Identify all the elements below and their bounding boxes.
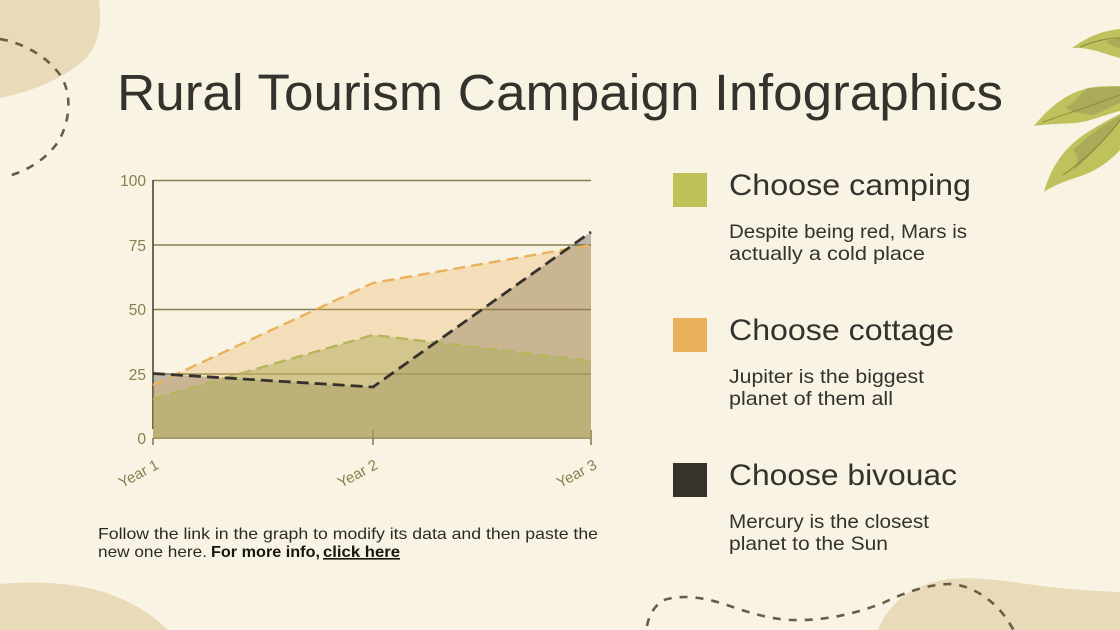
series: camping area <box>153 335 591 438</box>
series: camping line <box>153 335 591 399</box>
text: bivouac: planet to the Sun <box>729 533 888 555</box>
text: camping: Despite being red, Mars is <box>729 221 967 243</box>
chart note: new one here. <box>98 544 207 561</box>
swatch: bivouac <box>673 463 707 497</box>
blob: bottom right <box>878 578 1120 630</box>
y axis line <box>152 180 154 429</box>
chart note <box>98 526 598 561</box>
text: bivouac: Mercury is the closest <box>729 511 930 533</box>
legend item: camping <box>673 169 971 265</box>
leaf: top <box>1072 29 1120 58</box>
dashed curve: left <box>0 39 68 177</box>
text: cottage <box>729 366 925 410</box>
leaf: bottom <box>1044 114 1120 192</box>
heading: camping: Choose camping <box>729 169 971 202</box>
swatch: camping <box>673 173 707 207</box>
heading: cottage: Choose cottage <box>729 314 954 347</box>
chart note: For more info, <box>211 544 320 561</box>
y axis labels: 0 <box>137 431 146 448</box>
text: cottage: Jupiter is the biggest <box>729 366 925 388</box>
leaf: middle <box>1034 86 1120 126</box>
text: camping <box>729 221 967 265</box>
chart note: Follow the link in the graph to modify its data and then paste the <box>98 526 598 543</box>
chart note: click here <box>323 544 400 561</box>
title: Rural Tourism Campaign Infographics <box>117 64 1003 121</box>
y axis labels: 50 <box>129 302 146 319</box>
x axis labels <box>116 456 600 492</box>
area chart <box>116 173 600 492</box>
y axis labels <box>120 173 146 448</box>
text: bivouac <box>729 511 930 555</box>
y axis labels: 100 <box>120 173 146 190</box>
y axis labels: 25 <box>129 367 146 384</box>
text: camping: actually a cold place <box>729 243 925 265</box>
series: bivouac area <box>153 232 591 438</box>
decoration: leaves <box>1034 29 1120 192</box>
x axis labels: Year 2 <box>335 456 381 492</box>
chart gridlines <box>153 180 591 445</box>
series: cottage line <box>153 245 591 385</box>
y axis labels: 75 <box>129 238 146 255</box>
series: bivouac line <box>153 232 591 387</box>
blob: bottom left <box>0 582 168 630</box>
swatch: cottage <box>673 318 707 352</box>
series: cottage area <box>153 245 591 438</box>
x axis labels: Year 1 <box>116 456 162 492</box>
legend item: bivouac <box>673 459 957 555</box>
blob: top left <box>0 0 100 98</box>
x axis labels: Year 3 <box>554 456 600 492</box>
text: cottage: planet of them all <box>729 388 893 410</box>
legend item: cottage <box>673 314 954 410</box>
heading: bivouac: Choose bivouac <box>729 459 957 492</box>
dashed curve: bottom <box>647 584 1014 630</box>
